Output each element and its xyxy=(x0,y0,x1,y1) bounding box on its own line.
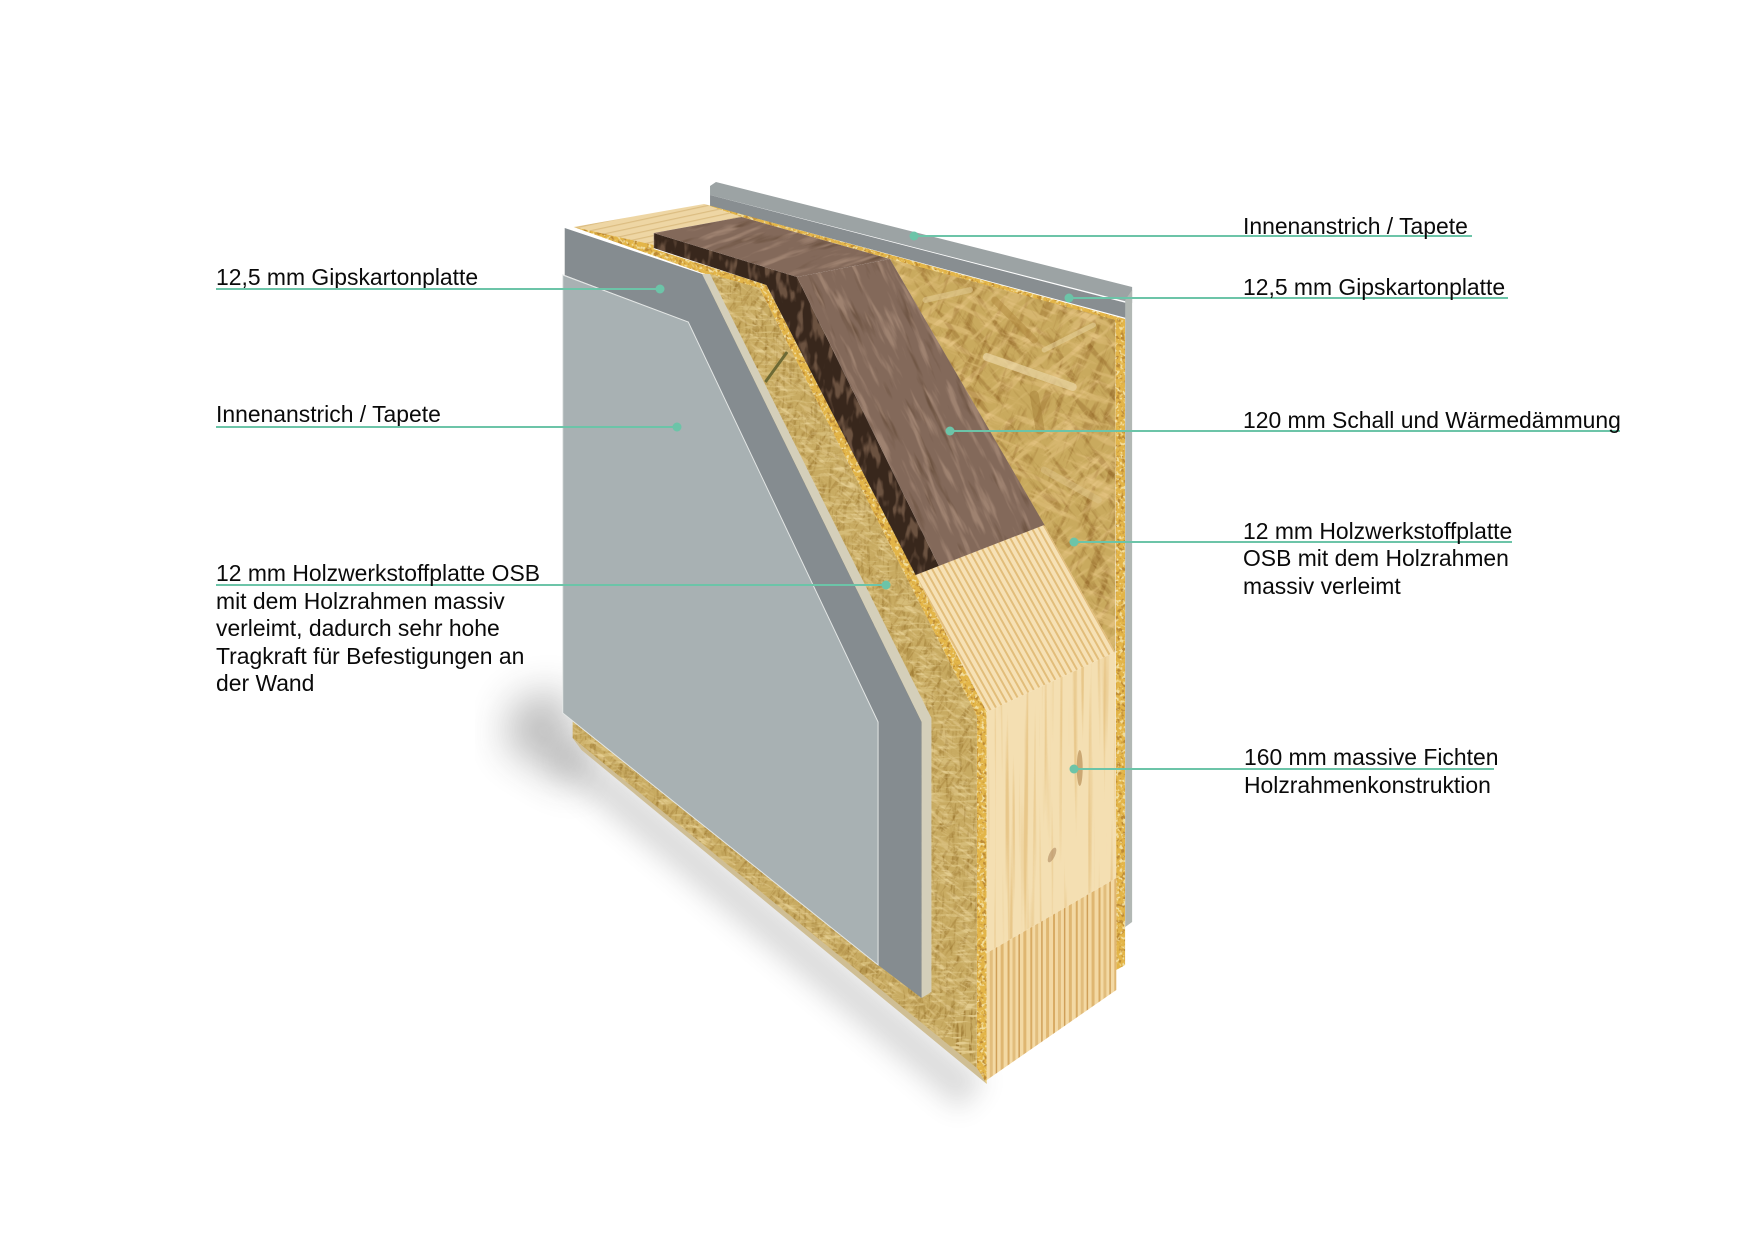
callout: Dämmung: 120 mm Schall und Wärmedämmung xyxy=(1243,407,1621,433)
plasterboard cut face xyxy=(565,228,922,998)
rear OSB panel xyxy=(890,259,1116,652)
callout: OSB right xyxy=(1070,518,1512,599)
callout: Innenanstrich left xyxy=(216,401,682,432)
wooden frame: front face xyxy=(987,652,1116,953)
callout: OSB left: der Wand xyxy=(216,670,314,696)
cream core layer xyxy=(702,274,931,998)
callout: Dämmung xyxy=(946,407,1621,436)
olive strand on OSB xyxy=(765,352,787,382)
wooden frame: sawn top face xyxy=(916,525,1115,712)
callout: Holzrahmen: 160 mm massive Fichten xyxy=(1244,744,1498,770)
top edge: OSB rear strip xyxy=(698,200,1133,330)
callout: OSB left xyxy=(216,560,890,696)
callout: OSB right: 12 mm Holzwerkstoffplatte xyxy=(1243,518,1512,544)
top edge: OSB front strip xyxy=(574,227,766,288)
back strip: grey side layer xyxy=(1125,290,1132,927)
callout: Innenanstrich left: Innenanstrich / Tapete xyxy=(216,401,441,427)
drop shadow: bottom edge xyxy=(550,735,985,1110)
callout: Innenanstrich right xyxy=(910,213,1472,240)
large strands xyxy=(926,290,1099,500)
OSB lower edge band xyxy=(573,738,987,1084)
top face: wood end of frame xyxy=(574,204,742,249)
callout: OSB right: OSB mit dem Holzrahmen xyxy=(1243,545,1509,571)
back rail: grey plasterboard top xyxy=(710,182,1132,318)
callout: Gipskartonplatte left: 12,5 mm Gipskartonplatte xyxy=(216,264,478,290)
callout: Gipskartonplatte right xyxy=(1064,274,1508,302)
callout: OSB left: mit dem Holzrahmen massiv xyxy=(216,588,505,614)
front OSB yellow edge xyxy=(753,280,990,1090)
callout: Holzrahmen xyxy=(1070,744,1498,798)
callout: OSB right: massiv verleimt xyxy=(1243,573,1401,599)
callout: OSB left: 12 mm Holzwerkstoffplatte OSB xyxy=(216,560,540,586)
insulation: top face xyxy=(654,217,890,277)
callout: Gipskartonplatte left xyxy=(216,264,664,294)
callout: Holzrahmen: Holzrahmenkonstruktion xyxy=(1244,772,1491,798)
callout: OSB left: verleimt, dadurch sehr hohe xyxy=(216,615,500,641)
callout: OSB left: Tragkraft für Befestigungen an xyxy=(216,643,524,669)
wooden frame: lower sawn face xyxy=(987,878,1116,1080)
callout: Innenanstrich right: Innenanstrich / Tapete xyxy=(1243,213,1468,239)
front OSB panel xyxy=(572,274,977,1068)
insulation: dark side face xyxy=(654,233,939,576)
painted inner surface xyxy=(563,275,878,965)
knot xyxy=(1046,750,1083,864)
rear OSB side edge xyxy=(1115,322,1126,970)
callout: Gipskartonplatte right: 12,5 mm Gipskartonplatte xyxy=(1243,274,1505,300)
insulation: front face xyxy=(797,259,1045,566)
drop shadow: corner xyxy=(505,690,580,790)
wall section illustration xyxy=(562,182,1132,1084)
